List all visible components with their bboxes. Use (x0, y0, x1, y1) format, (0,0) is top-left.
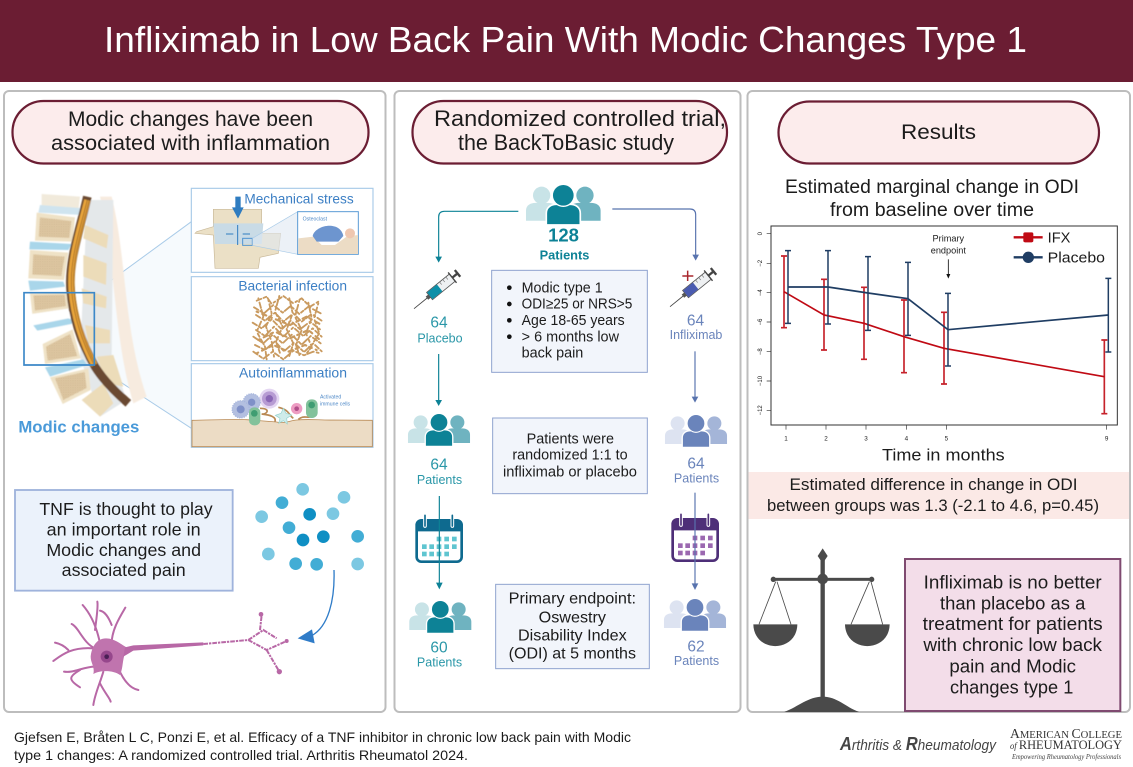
box: inclusion criteria: back pain (522, 346, 583, 362)
label: 64 patients infliximab: Patients (674, 472, 719, 486)
heading: Modic changes and inflammation: Modic changes have been (68, 107, 313, 131)
heading: results (778, 102, 1099, 164)
y axis: −4 (758, 289, 764, 296)
arrow: to infliximab (612, 209, 699, 261)
icon: infliximab patients 64 (665, 414, 727, 447)
callout: conclusion: pain and Modic (949, 655, 1076, 676)
label: 64 patients infliximab (674, 456, 719, 486)
box: inclusion criteria: ODI≥25 or NRS>5 (522, 297, 632, 313)
box: primary endpoint: (ODI) at 5 months (509, 646, 636, 663)
label: 64 infliximab: 64 (687, 312, 704, 330)
arrow: to placebo (435, 211, 518, 263)
label: 64 patients infliximab: 64 (687, 456, 705, 472)
label: 60 patients: Patients (417, 656, 462, 670)
annotation: primary endpoint: Primary (933, 234, 965, 244)
label: Autoinflammation: Autoinflammation (239, 365, 347, 381)
label: Modic changes: Modic changes (18, 417, 139, 436)
callout: difference between groups (748, 472, 1129, 519)
y axis: −8 (758, 348, 764, 355)
label: 62 patients: Patients (674, 654, 719, 668)
heading: Modic changes and inflammation (12, 101, 368, 164)
arrow: TNF to neuron (298, 570, 334, 643)
callout: conclusion: Infliximab is no better (924, 571, 1102, 592)
icon: 128 patients group (526, 184, 601, 225)
box: randomization: infliximab or placebo (503, 464, 637, 480)
label: 64 placebo (417, 314, 463, 346)
icon: infliximab calendar (672, 514, 718, 561)
illustration: lumbar spine (18, 194, 191, 436)
label: 64 infliximab (670, 312, 722, 342)
y axis: 0 (758, 231, 764, 235)
annotation: primary endpoint (931, 234, 966, 279)
x axis: 9 (1105, 435, 1109, 442)
legend: Placebo (1048, 250, 1105, 266)
callout: TNF role (15, 490, 233, 591)
x axis: 2 (824, 435, 828, 442)
heading: randomized controlled trial: Randomized controlled trial, (434, 106, 726, 131)
box: primary endpoint: Disability Index (518, 628, 627, 645)
box: inclusion criteria: Age 18-65 years (522, 313, 625, 329)
heading: Modic changes and inflammation: associated with inflammation (51, 131, 330, 155)
callout: TNF role: an important role in (47, 520, 201, 540)
callout: difference between groups: between groups was 1.3 (-2.1 to 4.6, p=0.45) (767, 497, 1099, 515)
callout: conclusion: with chronic low back (922, 634, 1103, 655)
label: Bacterial infection: Bacterial infection (238, 278, 347, 294)
box: autoinflammation: Activated (320, 394, 341, 400)
x axis: 1 (784, 435, 788, 442)
x axis: 3 (864, 435, 868, 442)
label: Mechanical stress: Mechanical stress (244, 190, 354, 206)
footer: citation: type 1 changes: A randomized controlled trial. Arthritis Rheumatol 2024. (14, 748, 468, 763)
label: 128 patients: Patients (540, 248, 589, 262)
panel: trial design (394, 91, 740, 712)
box: mechanical stress (191, 188, 373, 272)
box: primary endpoint: Oswestry (539, 609, 606, 626)
label: 128 patients (540, 224, 589, 262)
x axis: 5 (945, 435, 949, 442)
footer: citation (14, 730, 631, 763)
callout: conclusion (905, 559, 1120, 711)
panel: Modic changes background (4, 91, 386, 712)
chart title: Estimated marginal change in ODI (785, 177, 1079, 198)
box: inclusion criteria: > 6 months low (522, 329, 619, 345)
logo: American College of Rheumatology: of RHEUMATOLOGY (1010, 737, 1123, 752)
box: inclusion criteria: Modic type 1 (522, 280, 603, 296)
callout: TNF role: associated pain (62, 560, 186, 580)
icon: neuron (53, 602, 289, 705)
logo: American College of Rheumatology: AMERICAN COLLEGE (1010, 726, 1122, 741)
icon: placebo patients 64 (408, 413, 470, 446)
arrow: placebo to patients (435, 354, 442, 406)
legend: IFX (1048, 231, 1071, 247)
callout: conclusion: than placebo as a (940, 592, 1086, 613)
header banner (0, 0, 1133, 82)
heading: randomized controlled trial: the BackToBasic study (458, 130, 674, 155)
icon: placebo syringe (410, 268, 462, 314)
chart title (785, 177, 1079, 221)
y axis: −2 (758, 259, 764, 267)
annotation: primary endpoint: endpoint (931, 245, 966, 255)
series: placebo (785, 251, 1111, 366)
x axis: 4 (905, 435, 909, 442)
box: primary endpoint (496, 584, 649, 669)
callout: difference between groups: Estimated difference in change in ODI (790, 476, 1078, 494)
box: randomization (493, 418, 647, 494)
icon: infliximab syringe (666, 266, 718, 312)
heading: randomized controlled trial (412, 101, 727, 164)
box: autoinflammation: immune cells (320, 402, 351, 408)
label: 64 placebo: Placebo (417, 332, 463, 346)
y axis: −10 (758, 375, 764, 386)
label: 60 patients (417, 640, 462, 670)
box: inclusion criteria (492, 270, 647, 372)
box: mechanical stress: Osteoclast (303, 216, 328, 222)
icon: balance scale (753, 548, 890, 712)
label: 60 patients: 60 (430, 640, 448, 656)
x axis title: Time in months (882, 446, 1005, 465)
box: bacterial infection (191, 277, 373, 361)
footer: citation: Gjefsen E, Bråten L C, Ponzi E, et al. Efficacy of a TNF inhibitor in chronic low back pain with Modic (14, 730, 631, 745)
icon: TNF molecules (255, 483, 364, 571)
series: IFX (781, 256, 1107, 414)
icon: placebo patients 60 (409, 600, 471, 633)
label: 64 patients placebo: Patients (417, 473, 462, 487)
icon: placebo calendar (416, 515, 462, 562)
y axis: −12 (758, 405, 764, 415)
label: 64 infliximab: Infliximab (670, 328, 722, 342)
line chart: change in ODI (758, 226, 1117, 465)
label: 128 patients: 128 (548, 224, 579, 246)
box: randomization: Patients were (527, 431, 614, 447)
arrow: infliximab to patients (692, 351, 698, 403)
x axis (784, 425, 1109, 442)
callout: conclusion: treatment for patients (923, 613, 1103, 634)
arrow: infliximab follow-up (692, 493, 698, 590)
label: 64 patients placebo: 64 (430, 456, 448, 474)
chart title: from baseline over time (830, 200, 1034, 221)
y axis: −6 (758, 318, 764, 325)
box: randomization: randomized 1:1 to (512, 448, 628, 464)
label: 64 placebo: 64 (430, 314, 448, 332)
heading: results: Results (901, 120, 976, 144)
label: 62 patients: 62 (687, 638, 705, 656)
logo: American College of Rheumatology (1010, 726, 1123, 761)
title: Infliximab in Low Back Pain With Modic Changes Type 1 (104, 19, 1027, 60)
callout: TNF role: Modic changes and (46, 540, 201, 560)
label: 64 patients placebo (417, 456, 462, 487)
callout: TNF role: TNF is thought to play (39, 499, 213, 519)
label: 62 patients (674, 638, 719, 668)
box: primary endpoint: Primary endpoint: (509, 591, 636, 608)
arrow: placebo follow-up (436, 496, 443, 589)
box: autoinflammation (191, 364, 373, 447)
legend (1014, 231, 1105, 266)
panel: results (748, 91, 1130, 712)
logo: Arthritis & Rheumatology: Arthritis & Rheumatology (839, 734, 997, 754)
logo: American College of Rheumatology: Empowering Rheumatology Professionals (1011, 753, 1121, 761)
icon: infliximab patients 62 (664, 598, 726, 631)
callout: conclusion: changes type 1 (950, 676, 1073, 697)
y axis (758, 231, 771, 415)
